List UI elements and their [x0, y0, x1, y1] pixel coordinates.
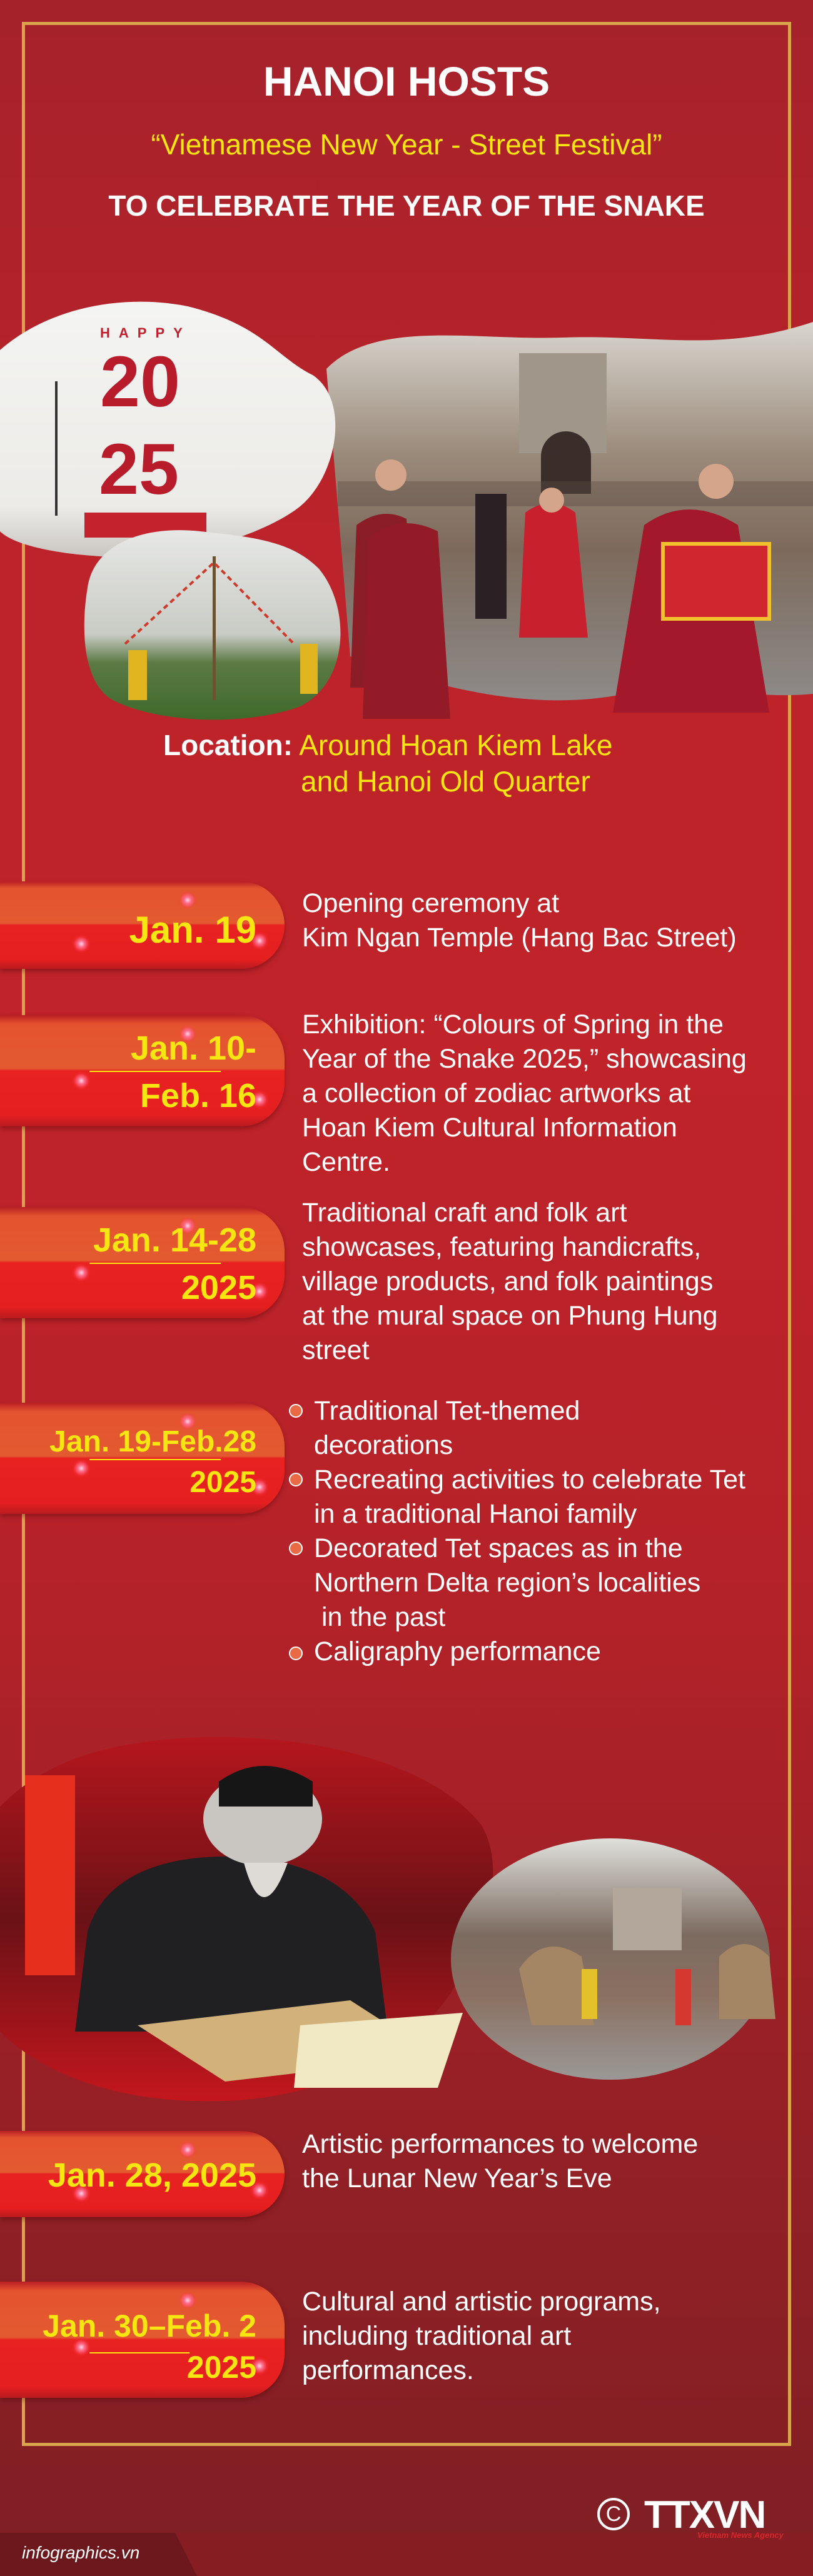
lion dance photo — [451, 1838, 775, 2080]
bullet list: Decorated Tet spaces as in the — [314, 1533, 683, 1563]
footer: infographics.vn — [0, 2533, 197, 2576]
description: Opening ceremony at — [302, 888, 559, 918]
title line 2: TO CELEBRATE THE YEAR OF THE SNAKE — [108, 189, 705, 222]
event 3: street — [302, 1335, 370, 1365]
description — [302, 888, 737, 953]
footer strip — [0, 2533, 813, 2576]
big photo — [326, 322, 813, 719]
event 4 — [0, 1396, 745, 1666]
bullet list: Northern Delta region’s localities — [314, 1568, 700, 1598]
event 6: Cultural and artistic programs, — [302, 2287, 661, 2317]
photo: tree pole — [84, 530, 340, 719]
event 5: the Lunar New Year’s Eve — [302, 2163, 612, 2193]
event 3: 2025 — [181, 1269, 256, 1306]
event 2: Jan. 10- — [131, 1030, 256, 1067]
event 5: Artistic performances to welcome — [302, 2129, 698, 2159]
event 2: Centre. — [302, 1147, 390, 1177]
photo: 2025 sign: 25 — [99, 429, 179, 509]
event 2: Hoan Kiem Cultural Information — [302, 1113, 677, 1143]
photo collage bottom — [0, 1737, 775, 2102]
event 6: including traditional art — [302, 2321, 571, 2351]
bullet list: in the past — [321, 1602, 445, 1632]
location — [163, 729, 612, 798]
date pill — [0, 881, 285, 969]
bullet list: Caligraphy performance — [314, 1636, 601, 1666]
event 6: performances. — [302, 2355, 474, 2385]
event 3: Traditional craft and folk art — [302, 1198, 627, 1228]
location: and Hanoi Old Quarter — [301, 765, 590, 798]
event 2: Exhibition: “Colours of Spring in the — [302, 1010, 724, 1040]
event 3: showcases, featuring handicrafts, — [302, 1232, 701, 1262]
logo: TTXVN: Vietnam News Agency — [697, 2530, 784, 2540]
description: Kim Ngan Temple (Hang Bac Street) — [302, 923, 737, 953]
logo: TTXVN: C — [606, 2502, 621, 2526]
footer: infographics.vn: infographics.vn — [22, 2543, 139, 2562]
event 6: Jan. 30–Feb. 2 — [43, 2308, 256, 2343]
location: Location: Around Hoan Kiem Lake — [163, 729, 612, 761]
photo: 2025 sign: HAPPY — [100, 325, 191, 341]
bullet list: Traditional Tet-themed — [314, 1396, 580, 1426]
event 1 — [0, 881, 737, 974]
bullet list: Recreating activities to celebrate Tet — [314, 1465, 745, 1495]
event 2: a collection of zodiac artworks at — [302, 1078, 690, 1108]
event 6: 2025 — [187, 2350, 256, 2385]
calligraphy photo — [0, 1737, 493, 2102]
event 3: village products, and folk paintings — [302, 1266, 713, 1296]
bullet list: decorations — [314, 1430, 453, 1460]
event 4: 2025 — [189, 1466, 256, 1499]
event 3 — [0, 1198, 718, 1365]
event 5: Jan. 28, 2025 — [48, 2157, 256, 2194]
logo: TTXVN — [597, 2493, 784, 2540]
bullet list — [289, 1396, 745, 1666]
photo: 2025 sign: 20 — [100, 342, 180, 422]
event 5 — [0, 2129, 698, 2223]
event 2: Feb. 16 — [140, 1077, 256, 1115]
event 4: Jan. 19-Feb.28 — [49, 1425, 256, 1458]
date pill: Jan. 19 — [129, 909, 256, 951]
event 3: at the mural space on Phung Hung — [302, 1301, 718, 1331]
event 3: Jan. 14-28 — [93, 1221, 256, 1259]
bullet list: in a traditional Hanoi family — [314, 1499, 637, 1529]
event 6 — [0, 2282, 661, 2403]
event 2 — [0, 1010, 747, 1177]
photo: 2025 sign — [0, 302, 335, 557]
photo collage top — [0, 301, 813, 720]
subtitle: “Vietnamese New Year - Street Festival” — [151, 128, 662, 161]
event 2: Year of the Snake 2025,” showcasing — [302, 1044, 747, 1074]
logo: TTXVN: TTXVN — [644, 2493, 765, 2537]
title: HANOI HOSTS — [263, 58, 550, 104]
